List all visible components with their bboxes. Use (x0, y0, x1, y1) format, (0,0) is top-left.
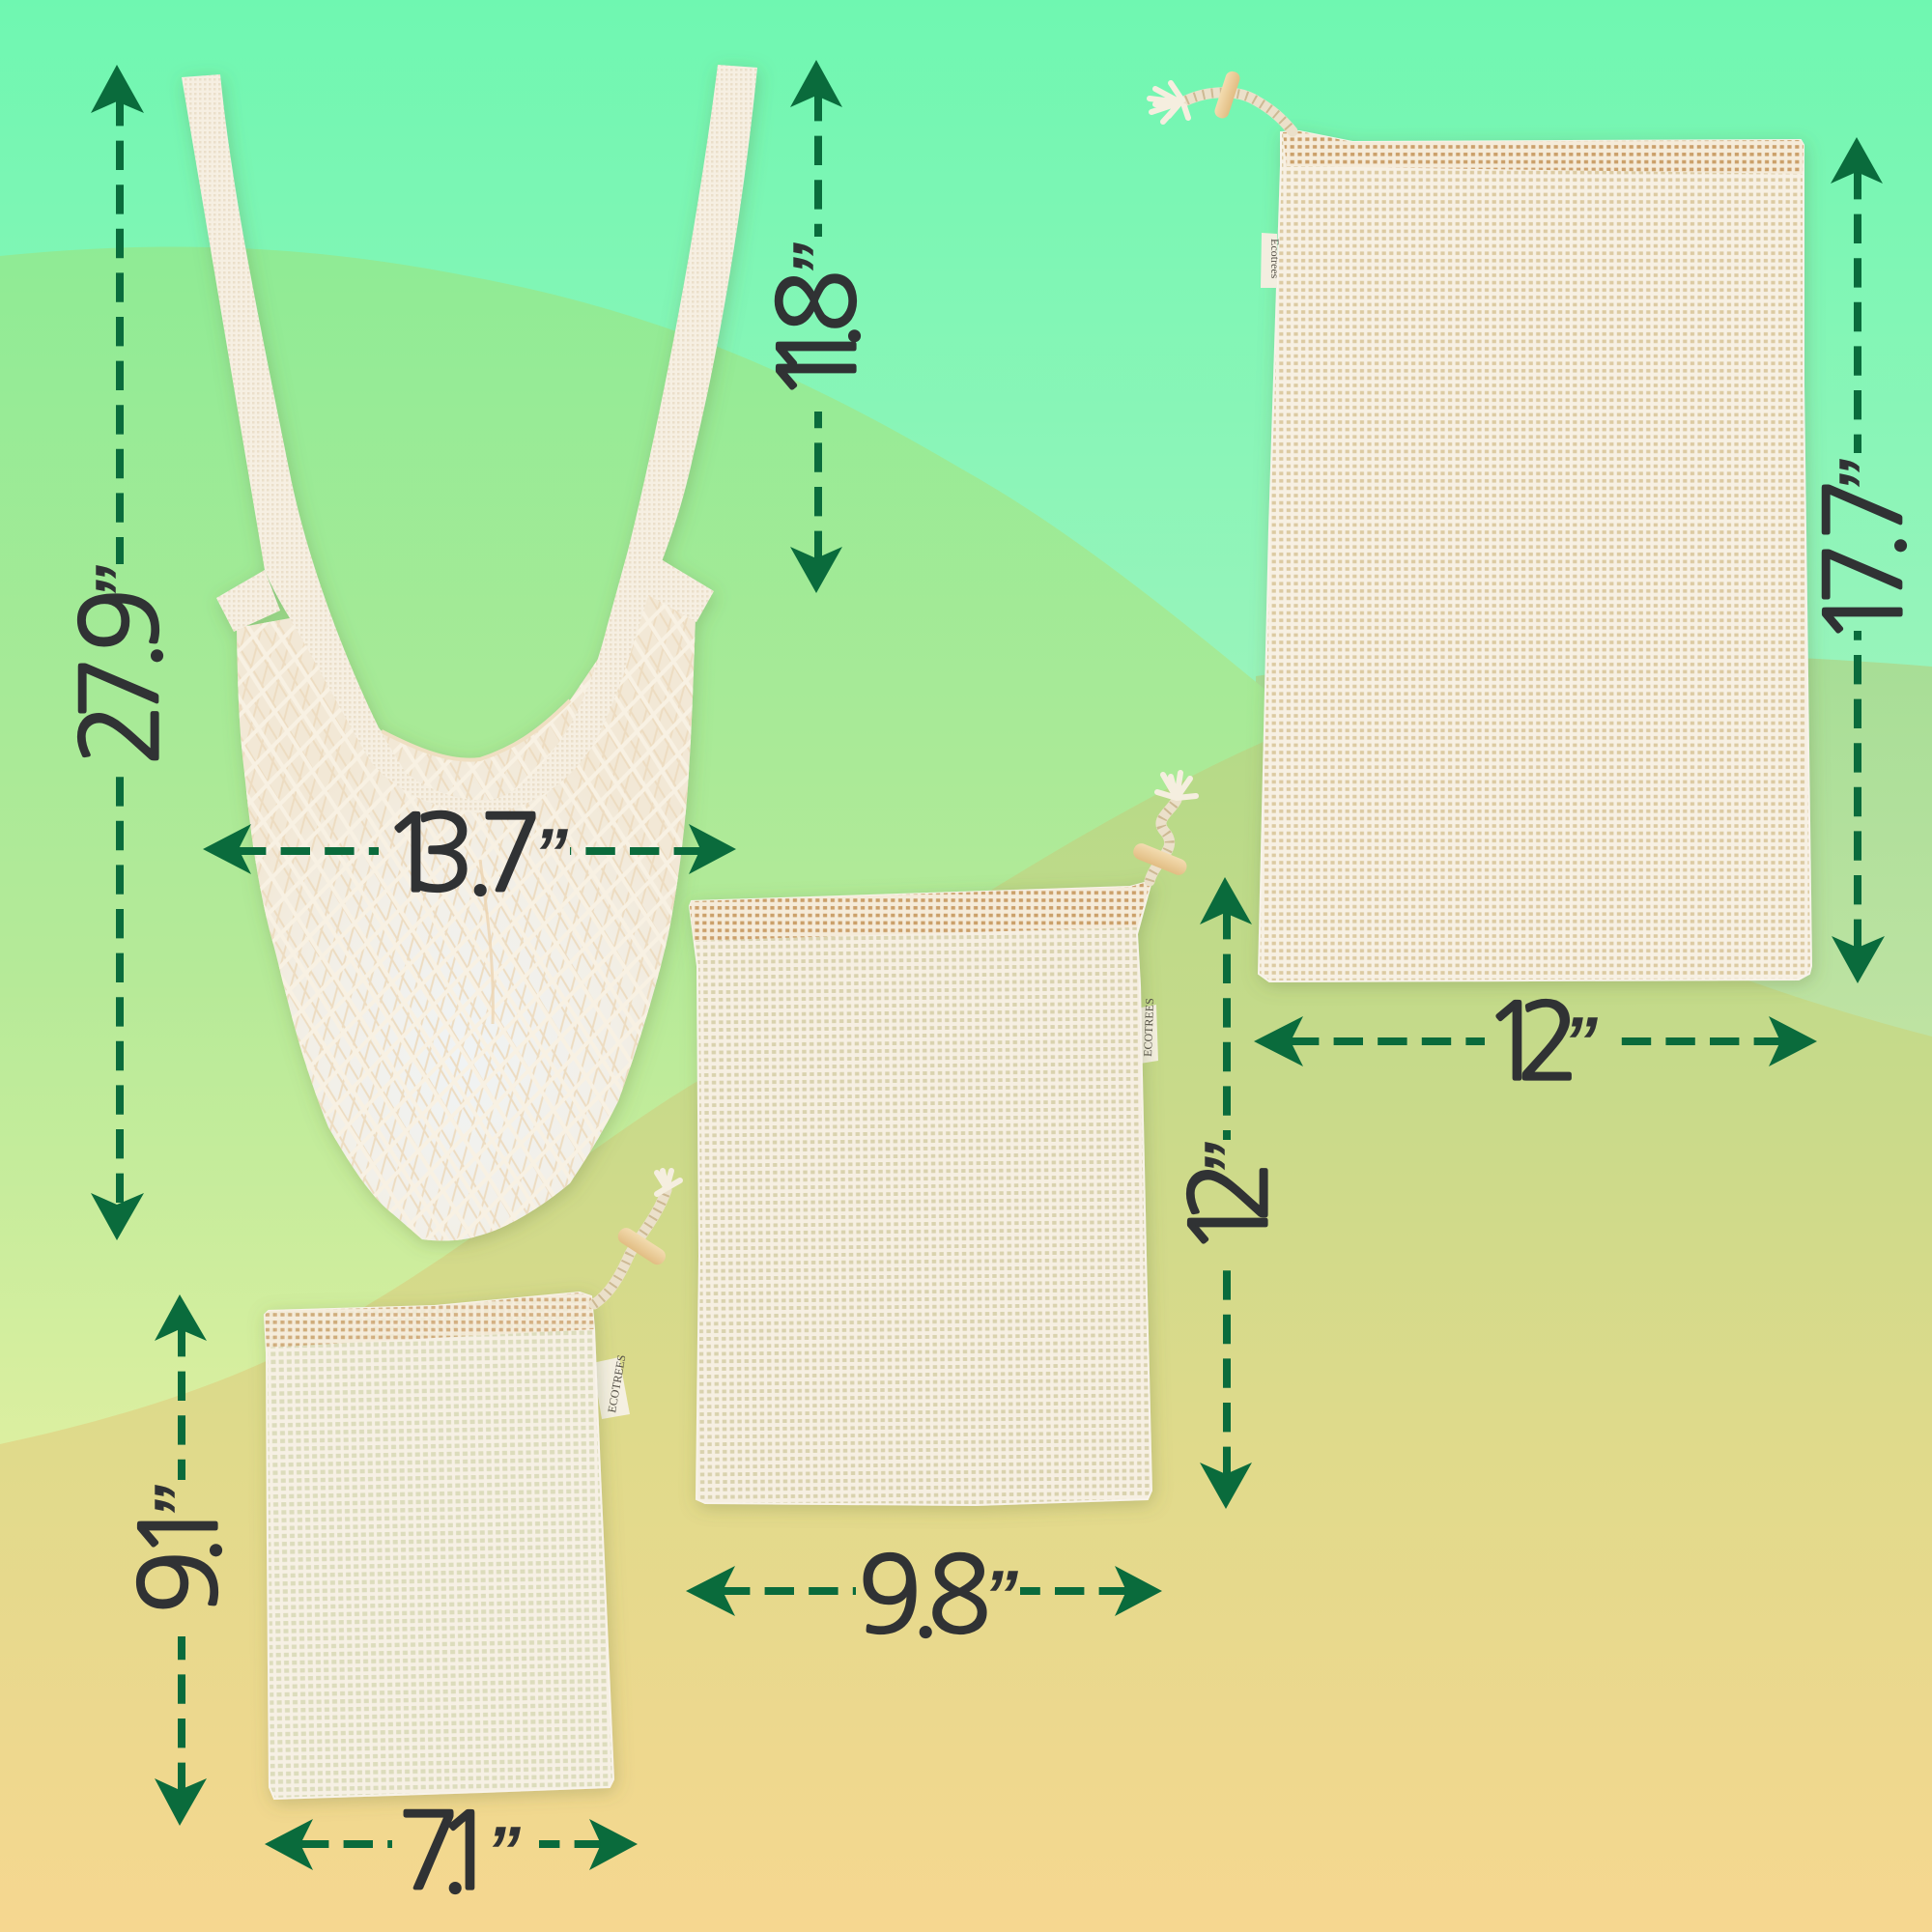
medium mesh bag (690, 773, 1196, 1505)
dimension: 17.7 inch height of large bag (1811, 137, 1917, 983)
hem large (1283, 131, 1804, 174)
string bag (182, 65, 757, 1240)
dimension: 27.9 inch height of string bag: ” (82, 565, 159, 600)
handles and front rim (182, 65, 757, 813)
hem medium (690, 881, 1151, 941)
label tag medium: ECOTREES (1141, 998, 1156, 1057)
drawstring small (594, 1171, 680, 1304)
dimension: 9.1 inch height of small bag (127, 1294, 232, 1826)
dimension: 13.7 inch width of string bag: 13.7 (381, 801, 543, 906)
dimension: 7.1 inch width of small bag: ” (486, 1813, 521, 1890)
dimension: 9.1 inch height of small bag: ” (141, 1485, 218, 1520)
dimension: 12 inch height of medium bag (1177, 877, 1282, 1509)
hem small (265, 1293, 594, 1348)
dimension: 27.9 inch height of string bag (68, 65, 173, 1240)
net body (237, 589, 696, 1240)
large mesh bag (1150, 70, 1811, 981)
dimension: 7.1 inch width of small bag: 7.1 (397, 1799, 498, 1904)
dimension: 12 inch width of large bag (1254, 989, 1817, 1094)
small mesh bag (265, 1171, 680, 1799)
dimension: 12 inch height of medium bag: ” (1191, 1142, 1268, 1177)
drawstring large (1150, 70, 1293, 131)
dimension: 9.8 inch width of medium bag: ” (983, 1557, 1018, 1634)
label tag small: ECOTREES (605, 1353, 628, 1414)
label tag medium (1136, 998, 1158, 1064)
dimension: 17.7 inch height of large bag: ” (1826, 459, 1903, 494)
bag body medium (690, 881, 1151, 1505)
dimension: 13.7 inch width of string bag: ” (533, 815, 568, 893)
bag body large (1259, 131, 1811, 981)
dimension: 11.8 inch handle: ” (780, 242, 857, 277)
left tab (216, 570, 280, 632)
dimension: 9.1 inch height of small bag: 9.1 (127, 1497, 232, 1614)
back rim (382, 700, 570, 760)
dimension: 13.7 inch width of string bag (203, 801, 736, 906)
dimension: 17.7 inch height of large bag: 17.7 (1811, 477, 1917, 647)
dimension: 7.1 inch width of small bag (265, 1799, 638, 1904)
label tag large (1261, 233, 1282, 288)
dimension: 12 inch width of large bag: 12 (1482, 989, 1580, 1094)
label tag small (592, 1353, 630, 1419)
dimension: 9.8 inch width of medium bag (686, 1543, 1162, 1648)
label tag large: Ecotrees (1268, 239, 1282, 279)
dimension: 11.8 inch handle (765, 60, 870, 593)
dimension: 27.9 inch height of string bag: 27.9 (68, 588, 173, 766)
dimension: 11.8 inch handle: 11.8 (765, 270, 870, 404)
dimension: 9.8 inch width of medium bag: 9.8 (858, 1543, 991, 1648)
bag body small (265, 1293, 613, 1799)
right tab (641, 554, 714, 622)
dimension: 12 inch width of large bag: ” (1563, 1004, 1598, 1081)
drawstring medium (1131, 773, 1196, 881)
dimension: 12 inch height of medium bag: 12 (1177, 1159, 1282, 1258)
